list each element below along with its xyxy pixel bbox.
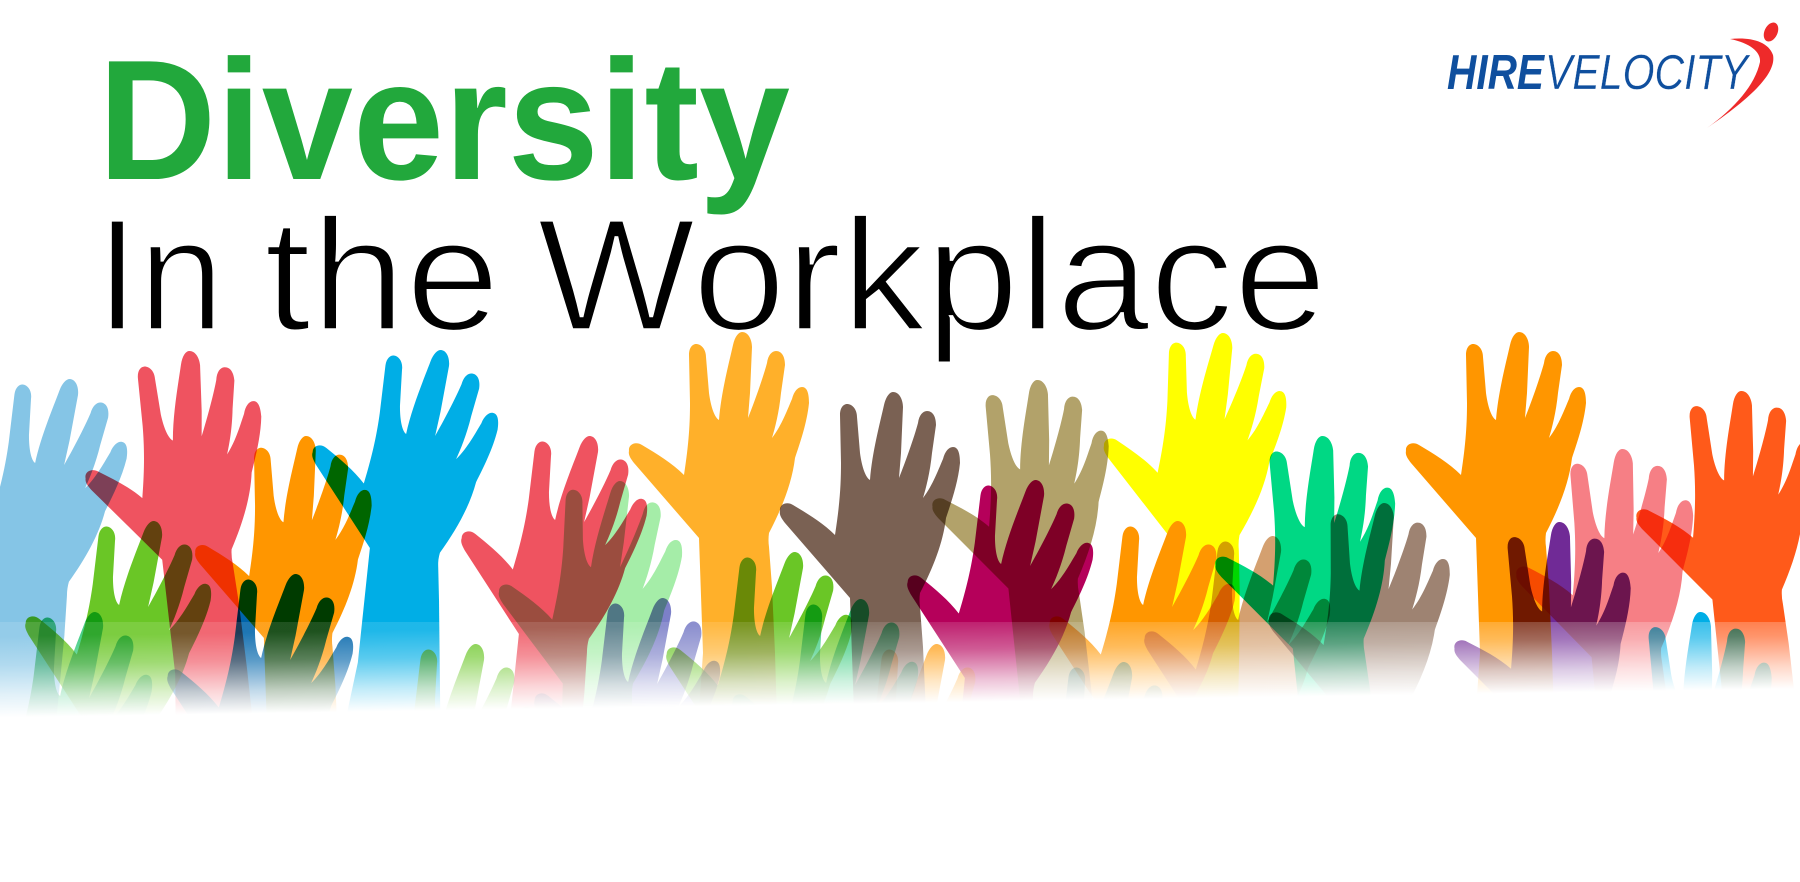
hand: orange large: [1406, 332, 1586, 753]
hand: front dark blue: [149, 558, 362, 836]
hand: amber: [629, 332, 809, 753]
hand: khaki: [924, 375, 1133, 808]
hand: front green small: [335, 628, 542, 857]
hand: tan: [1266, 501, 1451, 759]
subtitle: In the Workplace: In: [96, 185, 224, 364]
hand: faded steel: [983, 646, 1190, 875]
hand: teal green: [1207, 431, 1420, 872]
logo: Hire Velocity: [1447, 20, 1781, 128]
hand: front blue right: [1587, 607, 1781, 825]
hand: front sea green left: [0, 596, 161, 825]
hand: light tan: [1126, 520, 1339, 798]
hand: front green left: [7, 505, 220, 783]
hand: red orange: [1628, 386, 1800, 819]
hand: pink: [1509, 445, 1715, 876]
hand: orange: [195, 436, 372, 849]
hand: steel lavender: [522, 582, 729, 811]
white fade over the hands: [0, 622, 1800, 882]
title: Diversity: Diversity: [98, 25, 790, 216]
hand: purple: [1446, 517, 1644, 784]
hand: front orange centre: [1031, 505, 1244, 783]
logo: Hire Velocity: VELOCITY: [1545, 46, 1751, 100]
illustration: raised hands: [0, 327, 1800, 876]
logo: Hire Velocity: HIRE: [1447, 46, 1545, 100]
hand: front green centre: [648, 536, 861, 814]
hand: faded orange: [796, 628, 1003, 857]
hand: red second: [419, 420, 656, 862]
hand: cyan blue: [270, 334, 507, 780]
hand: yellow: [1088, 327, 1290, 757]
hand: brown: [780, 392, 960, 813]
subtitle: In the Workplace: Workplace: [537, 185, 1327, 364]
subtitle: In the Workplace: [96, 185, 1327, 364]
hand: front sea green centre: [720, 583, 927, 812]
hand: magenta: [889, 464, 1102, 742]
hand: light blue: [0, 363, 136, 805]
subtitle: In the Workplace: the: [264, 185, 500, 364]
hand: light green: [489, 473, 687, 740]
hand: red: [76, 346, 289, 780]
